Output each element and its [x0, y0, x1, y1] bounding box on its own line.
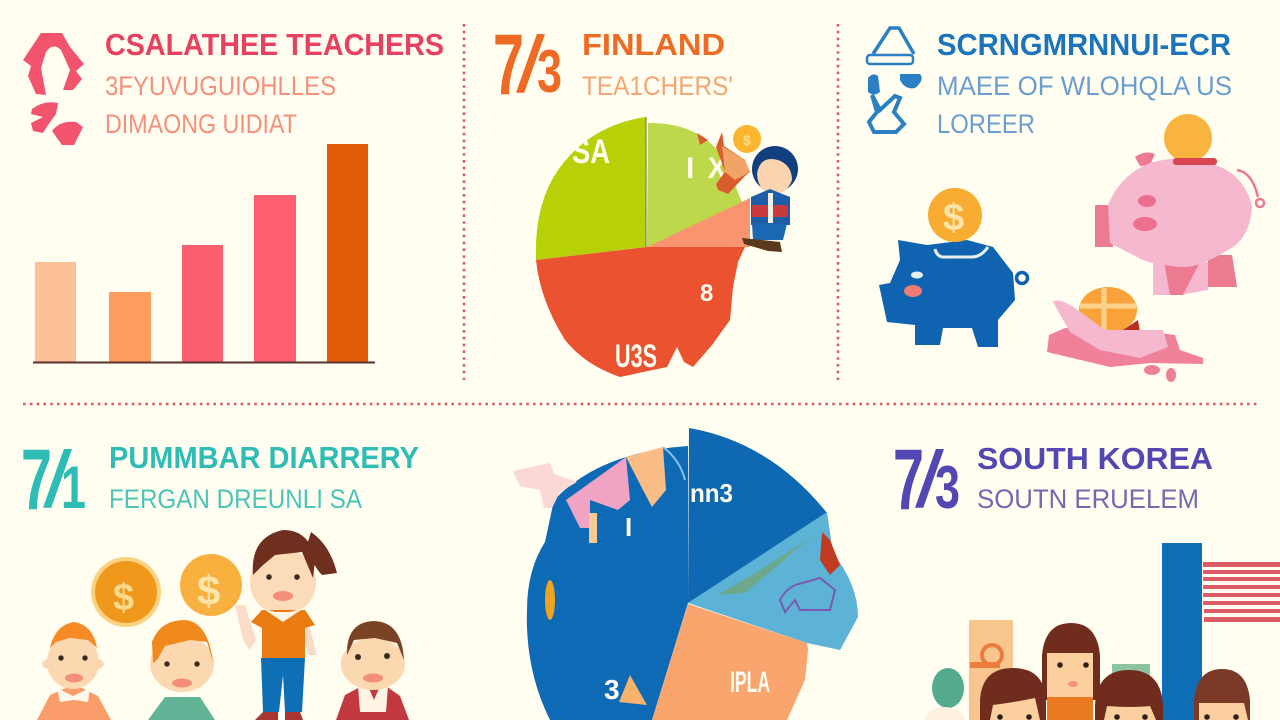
illustration: centre girl	[1042, 623, 1100, 720]
panel: South Korea	[893, 432, 1280, 720]
icon: fraction numeral: /	[915, 435, 945, 524]
pie chart: I	[625, 512, 632, 542]
subheading: LOREER	[937, 109, 1035, 139]
illustration: child with horse and coin	[697, 125, 798, 252]
pie chart: 8	[700, 280, 713, 307]
illustration: left child	[37, 622, 111, 720]
bar	[1162, 543, 1202, 720]
illustration: left child	[980, 668, 1046, 720]
icon: fraction numeral: /	[516, 20, 546, 109]
illustration: far right child	[1194, 669, 1250, 720]
illustration: second child	[148, 620, 215, 720]
icon: fraction numeral	[493, 17, 562, 113]
bar chart	[33, 144, 375, 364]
illustration: blue piggy bank with coin: $	[943, 197, 964, 239]
subheading	[937, 71, 1232, 139]
panel: top left teachers bar chart	[23, 27, 444, 364]
illustration: right child	[1095, 670, 1163, 720]
panel: primary teachers and children	[21, 432, 419, 720]
icon: fraction numeral: 1	[61, 454, 86, 521]
pie chart: U3S	[615, 338, 657, 374]
icon: fraction numeral: 3	[537, 38, 562, 105]
icon: fraction numeral: 7	[893, 432, 924, 528]
panel: world pie chart	[513, 428, 858, 720]
panel: Finland pie chart	[493, 17, 798, 377]
subheading: SOUTN ERUELEM	[977, 484, 1199, 514]
subheading: FERGAN DREUNLI SA	[109, 484, 362, 514]
panel: piggy banks	[867, 27, 1264, 382]
illustration: girl	[235, 530, 337, 720]
illustration: coins	[91, 554, 242, 627]
pie chart: X	[708, 152, 726, 185]
illustration: blue piggy bank with coin	[879, 188, 1028, 347]
subheading: DIMAONG UIDIAT	[105, 109, 297, 139]
pie chart	[527, 428, 858, 720]
subheading: MAEE OF WLOHQLA US	[937, 71, 1232, 101]
pie chart: IPLA	[730, 666, 770, 699]
icon: red abstract emblem	[23, 33, 84, 145]
illustration: coins: $	[197, 567, 220, 614]
icon: fraction numeral: /	[43, 435, 73, 524]
icon: fraction numeral: 3	[935, 454, 960, 521]
icon: blue abstract emblem	[867, 28, 922, 132]
illustration: coins: $	[113, 577, 134, 619]
pie chart	[536, 117, 750, 377]
heading: PUMMBAR DIARRERY	[109, 440, 419, 475]
illustration: right child	[336, 621, 409, 720]
subheading	[105, 71, 336, 139]
heading: FINLAND	[582, 27, 725, 62]
illustration: bottle and boxes	[925, 620, 1150, 720]
pie chart: nn3	[690, 478, 733, 508]
heading: SOUTH KOREA	[977, 441, 1213, 476]
illustration: pale map fragment	[513, 463, 577, 508]
illustration: striped flag	[1203, 562, 1280, 622]
heading: CSALATHEE TEACHERS	[105, 27, 444, 62]
subheading: 3FYUVUGUIOHLLES	[105, 71, 336, 101]
icon: fraction numeral: 7	[493, 17, 524, 113]
pie chart: I	[686, 152, 694, 185]
heading: SCRNGMRNNUI-ECR	[937, 27, 1231, 62]
icon: fraction numeral: 7	[21, 432, 52, 528]
pie chart: SA	[572, 133, 610, 171]
illustration: pink hand with coin	[1047, 287, 1203, 382]
illustration: child with horse and coin: $	[743, 132, 751, 148]
subheading: TEA1CHERS'	[582, 71, 733, 101]
illustration: pink piggy bank with coin	[1095, 114, 1264, 295]
pie chart: 3	[604, 674, 620, 705]
